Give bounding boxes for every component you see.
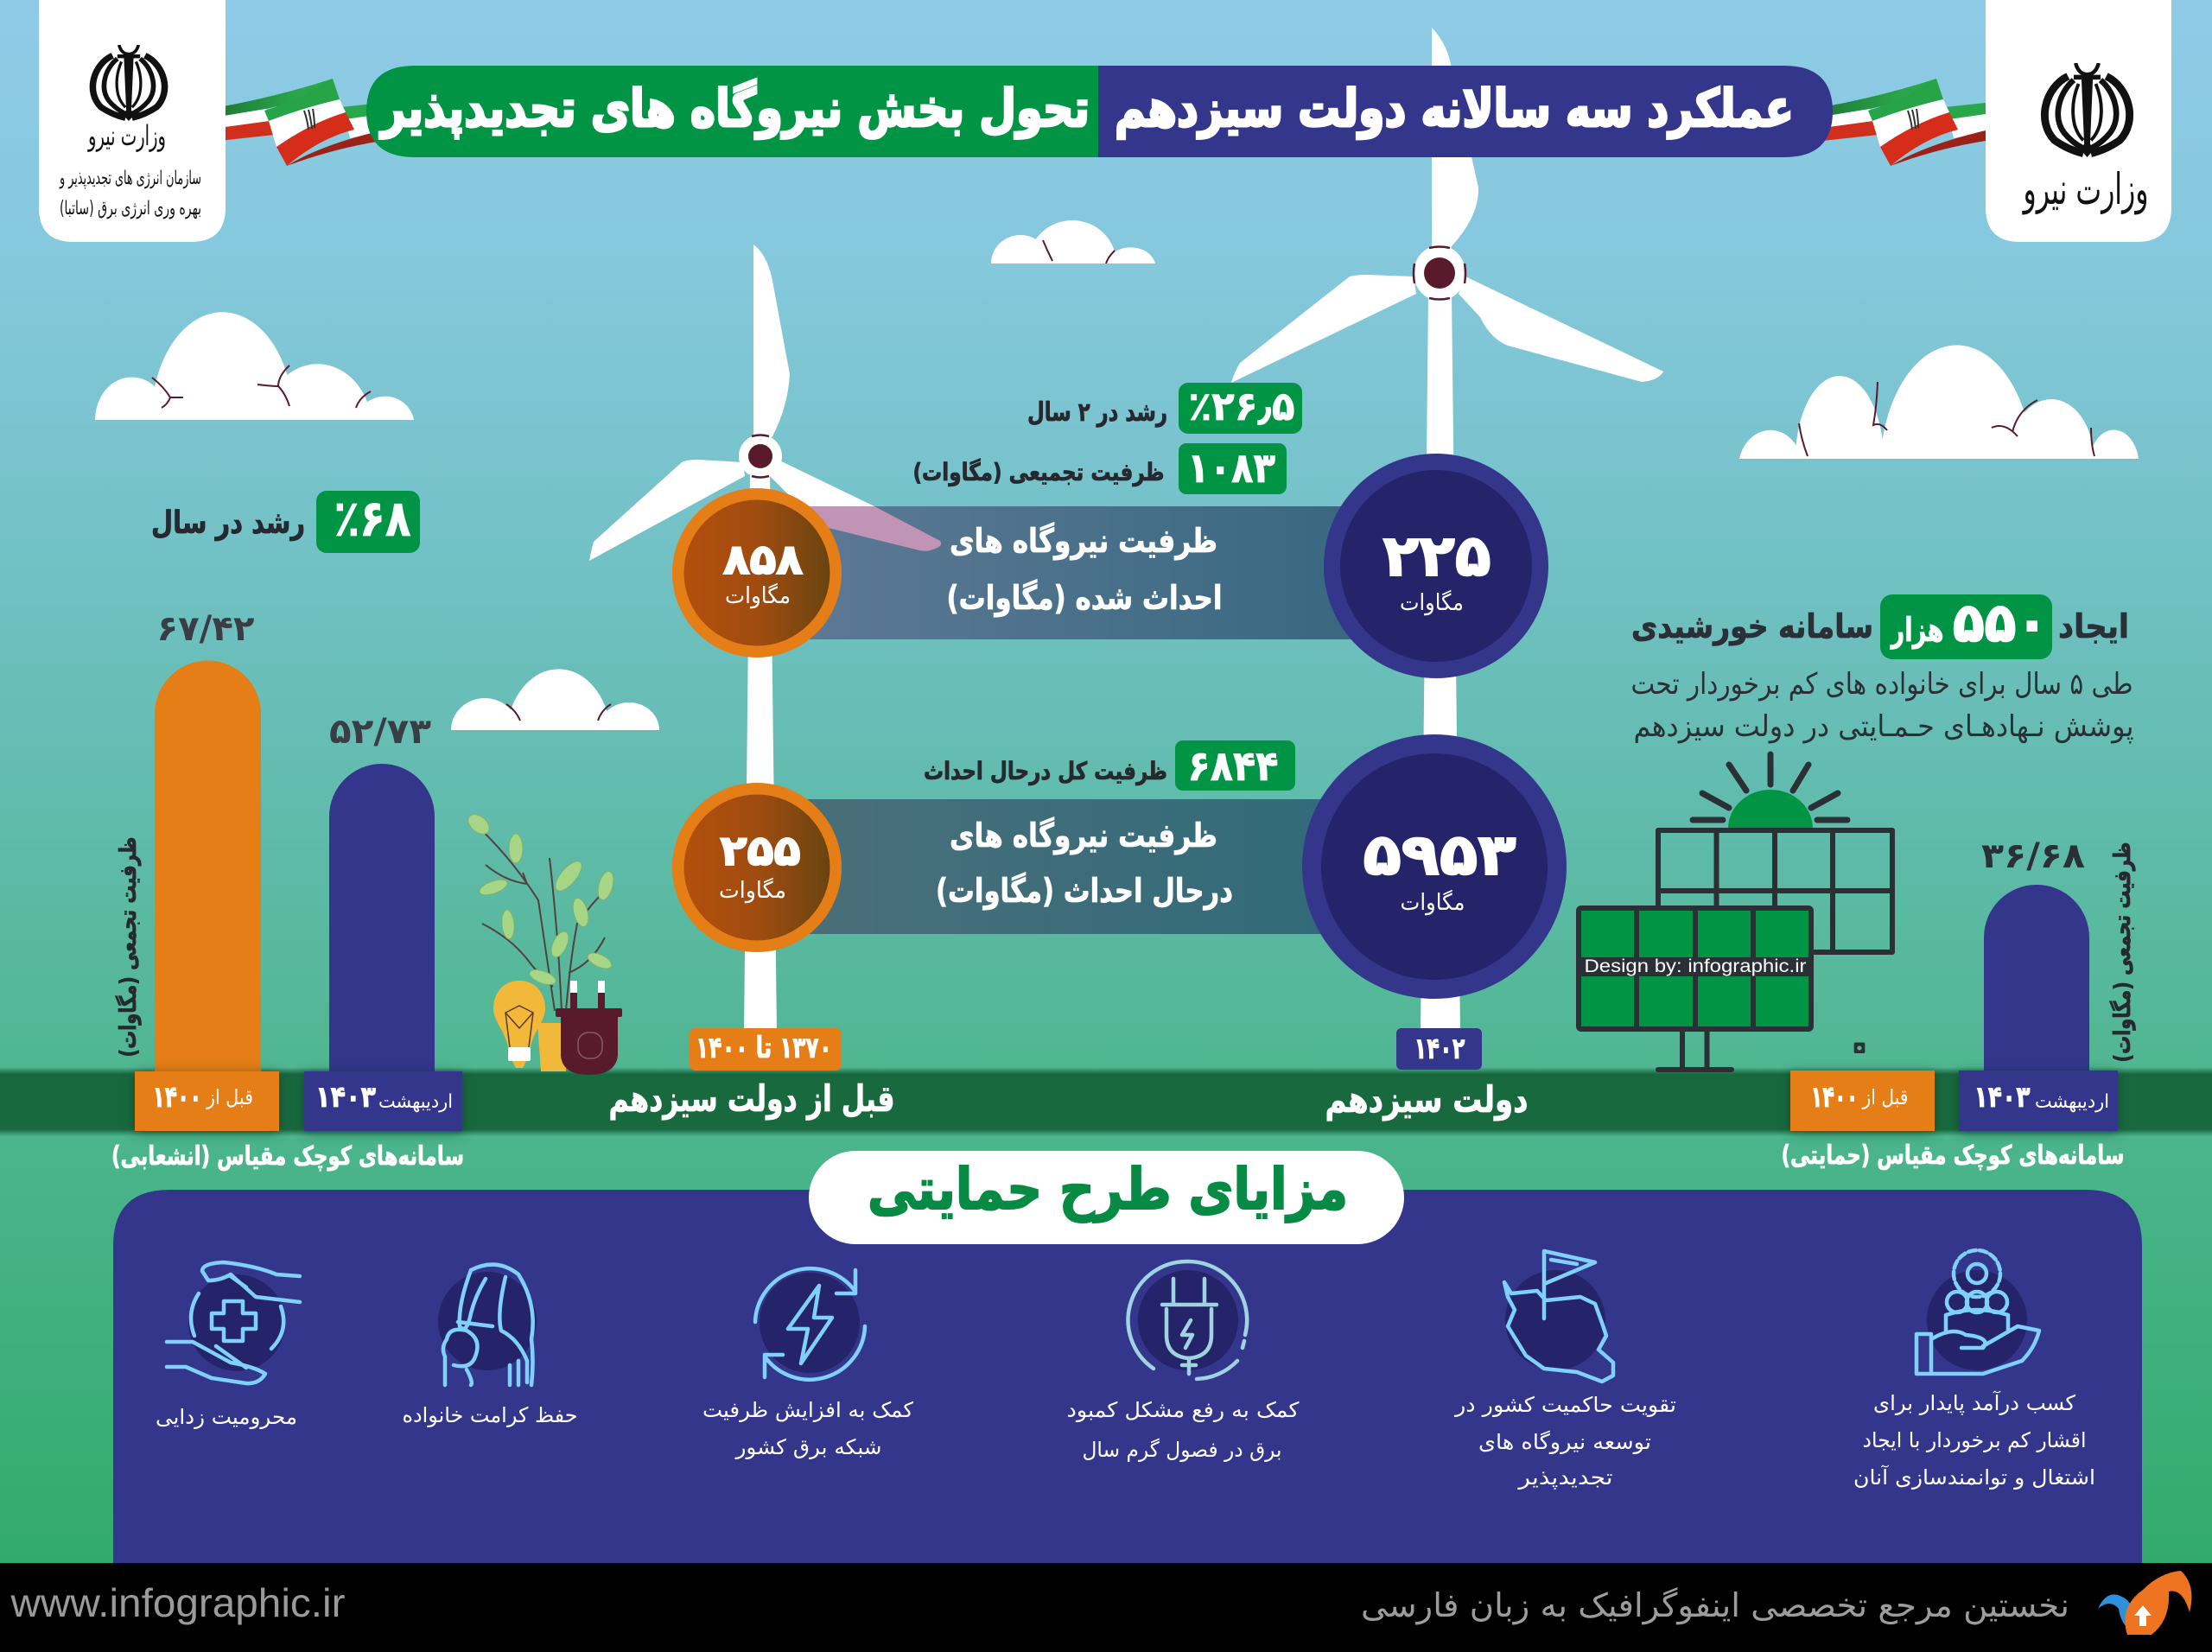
website: www.infographic.ir [10,1580,346,1625]
flag ribbon: right [1822,79,1986,166]
solar block: headline and description: سامانه خورشیدی [1631,607,1873,645]
cloud: middle left [451,669,659,730]
circle: 858: ۸۵۸ [723,536,803,584]
front panel [1579,908,1811,1029]
left bar chart: grid connected systems [111,609,464,1172]
band: installed capacity: ظرفیت نیروگاه های [950,522,1217,561]
strip label: 13th government: دولت سیزدهم [1325,1078,1528,1121]
stat: total under construction 6844: ۶۸۴۴ [1187,742,1279,791]
circle: 5953: مگاوات [1400,889,1465,916]
stat: cumulative capacity 1083: ۱۰۸۳ [1187,444,1275,492]
benefit: sustainable income [1853,1250,2095,1490]
benefit: sustainable income: اشتغال و توانمندسازی آنان [1853,1465,2095,1490]
growth stat: 68 percent: ٪۶۸ [334,489,411,548]
band: under construction capacity: درحال احداث (مگاوات) [936,872,1233,911]
benefit: sustainable income: کسب درآمد پایدار برای [1873,1390,2076,1415]
title banner: عملکرد سه سالانه دولت سیزدهم [1115,79,1794,139]
headline pill [1880,594,2052,659]
circle: 225 [1324,454,1548,678]
icon: infographic logo [2098,1571,2191,1635]
illustration: sun and solar panels: Design by: infographic.ir [1585,956,1807,976]
logo panel: left: بهره وری انرژی برق (ساتبا) [60,198,201,219]
logo panel: right [1986,0,2171,242]
label box: before 1400: قبل از [1862,1085,1908,1109]
title: green part [366,66,1098,157]
solar block: headline and description: ایجاد [2058,607,2129,645]
stat: cumulative capacity 1083 [912,443,1287,494]
value 36.68: ۳۶/۶۸ [1981,836,2085,876]
benefit: national sovereignty: تقویت حاکمیت کشور در [1454,1393,1676,1417]
stat: growth 26.5 percent in 2 years: رشد در ۲ سال [1027,397,1167,428]
circle: 5953 [1302,734,1567,999]
logo panel: left: سازمان انرژی های تجدیدپذیر و [59,168,201,189]
cloud: upper right [1739,346,2139,459]
label box: Ordibehesht 1403 [1959,1071,2118,1131]
solar block: headline and description: هزار [1890,611,1944,649]
footer [0,1563,2212,1652]
band: under construction capacity: ظرفیت نیروگاه های [950,816,1217,855]
circle: 255: ۲۵۵ [721,827,800,875]
year pill: 1402: ۱۴۰۲ [1414,1032,1465,1066]
right bar chart: supported systems [1782,836,2136,1171]
circle: 858: مگاوات [725,582,791,609]
stat: growth 26.5 percent in 2 years: ٪۲۶٫۵ [1189,383,1294,429]
benefit: family dignity: حفظ کرامت خانواده [403,1403,577,1427]
circle: 225: مگاوات [1400,589,1464,616]
benefits panel: مزایای طرح حمایتی [868,1156,1348,1223]
label box: before 1400: ۱۴۰۰ [1811,1080,1858,1115]
illustration: sun and solar panels [1579,754,1892,1070]
circle: 5953: ۵۹۵۳ [1363,822,1516,888]
benefits panel [113,1151,2142,1563]
tagline: نخستین مرجع تخصصی اینفوگرافیک به زبان فارسی [1361,1586,2069,1625]
band: installed capacity [760,506,1382,639]
label box: Ordibehesht 1403: ۱۴۰۳ [1974,1080,2031,1115]
benefit: sustainable income: اقشار کم برخوردار با ایجاد [1863,1428,2086,1452]
year pill: 1370 to 1400: ۱۳۷۰ تا ۱۴۰۰ [696,1031,832,1065]
title: blue part [1098,66,1833,157]
strip label: before 13th government: قبل از دولت سیزدهم [608,1077,895,1121]
back panel [1658,830,1892,952]
benefit: national sovereignty [1454,1251,1676,1490]
circle: 255 [672,783,842,952]
growth stat: 68 percent [151,489,420,553]
benefit: poverty alleviation [156,1262,300,1429]
label box: Ordibehesht 1403: اردیبهشت [2035,1091,2109,1113]
benefit: grid capacity: شبکه برق کشور [734,1435,881,1459]
ground strip [0,1067,2212,1136]
solar block: headline and description [1631,591,2134,744]
stat: total under construction 6844 [924,740,1295,791]
label box: before 1400 [135,1071,279,1131]
value zero: ۰ [1847,1020,1872,1071]
wind turbine: large [1231,28,1663,1032]
logo panel: left [39,0,226,242]
illustration: plant, bulb and plug [464,810,622,1075]
benefit: electricity shortage: کمک به رفع مشکل کمبود [1066,1398,1300,1422]
value 67.42: ۶۷/۴۲ [157,609,254,649]
benefit: national sovereignty: تجدیدپذیر [1517,1465,1612,1490]
label box: before 1400 [1790,1071,1935,1131]
benefit: national sovereignty: توسعه نیروگاه های [1478,1430,1651,1454]
value 52.73: ۵۲/۷۳ [329,712,431,752]
stat: growth 26.5 percent in 2 years [1027,383,1302,434]
title banner [366,66,1833,157]
bar: 1403 [1984,885,2089,1071]
wind turbine: small [589,245,941,1032]
bar: 1403 [329,764,435,1071]
label box: before 1400: قبل از [206,1085,253,1109]
circle: 255: مگاوات [719,877,786,904]
stat: total under construction 6844: ظرفیت کل درحال احداث [924,757,1167,785]
solar block: headline and description: پوشش نـهادهـای حـمـایتی در دولت سیزدهم [1633,709,2134,744]
bar: before 1400 [155,661,261,1071]
label box: Ordibehesht 1403: اردیبهشت [378,1091,453,1113]
benefit: family dignity [403,1265,577,1427]
cloud: top centre [991,220,1155,264]
label box: Ordibehesht 1403: ۱۴۰۳ [315,1080,376,1115]
caption: سامانه‌های کوچک مقیاس (انشعابی) [111,1141,464,1172]
axis label: ظرفیت تجمعی (مگاوات) [2109,842,2136,1063]
circle: 858 [672,488,842,658]
benefit: poverty alleviation: محرومیت زدایی [156,1405,297,1429]
benefit: electricity shortage [1066,1261,1300,1462]
cloud: upper left [95,312,414,420]
band: installed capacity: احداث شده (مگاوات) [947,579,1222,618]
watermark [1581,957,1809,976]
growth stat: 68 percent: رشد در سال [151,505,305,541]
logo panel: left: وزارت نیرو [87,119,166,152]
year pill: 1402 [1396,1028,1482,1070]
benefit: electricity shortage: برق در فصول گرم سال [1082,1438,1282,1462]
benefit: grid capacity [702,1268,914,1459]
sun [1728,790,1813,829]
title banner: تحول بخش نیروگاه های تجدیدپذیر [379,79,1090,139]
stat: cumulative capacity 1083: ظرفیت تجمیعی (مگاوات) [912,458,1165,486]
heading pill [809,1151,1404,1244]
band: under construction capacity [760,799,1382,934]
flag ribbon: left [219,79,382,166]
solar block: headline and description: ۵۵۰ [1953,591,2048,654]
label box: before 1400: ۱۴۰۰ [152,1080,202,1115]
solar block: headline and description: طی ۵ سال برای خانواده های کم برخوردار تحت [1631,667,2133,702]
benefit: grid capacity: کمک به افزایش ظرفیت [702,1398,914,1422]
label box: Ordibehesht 1403 [304,1071,462,1131]
circle: 225: ۲۲۵ [1382,523,1491,589]
axis label: ظرفیت تجمعی (مگاوات) [115,836,142,1058]
